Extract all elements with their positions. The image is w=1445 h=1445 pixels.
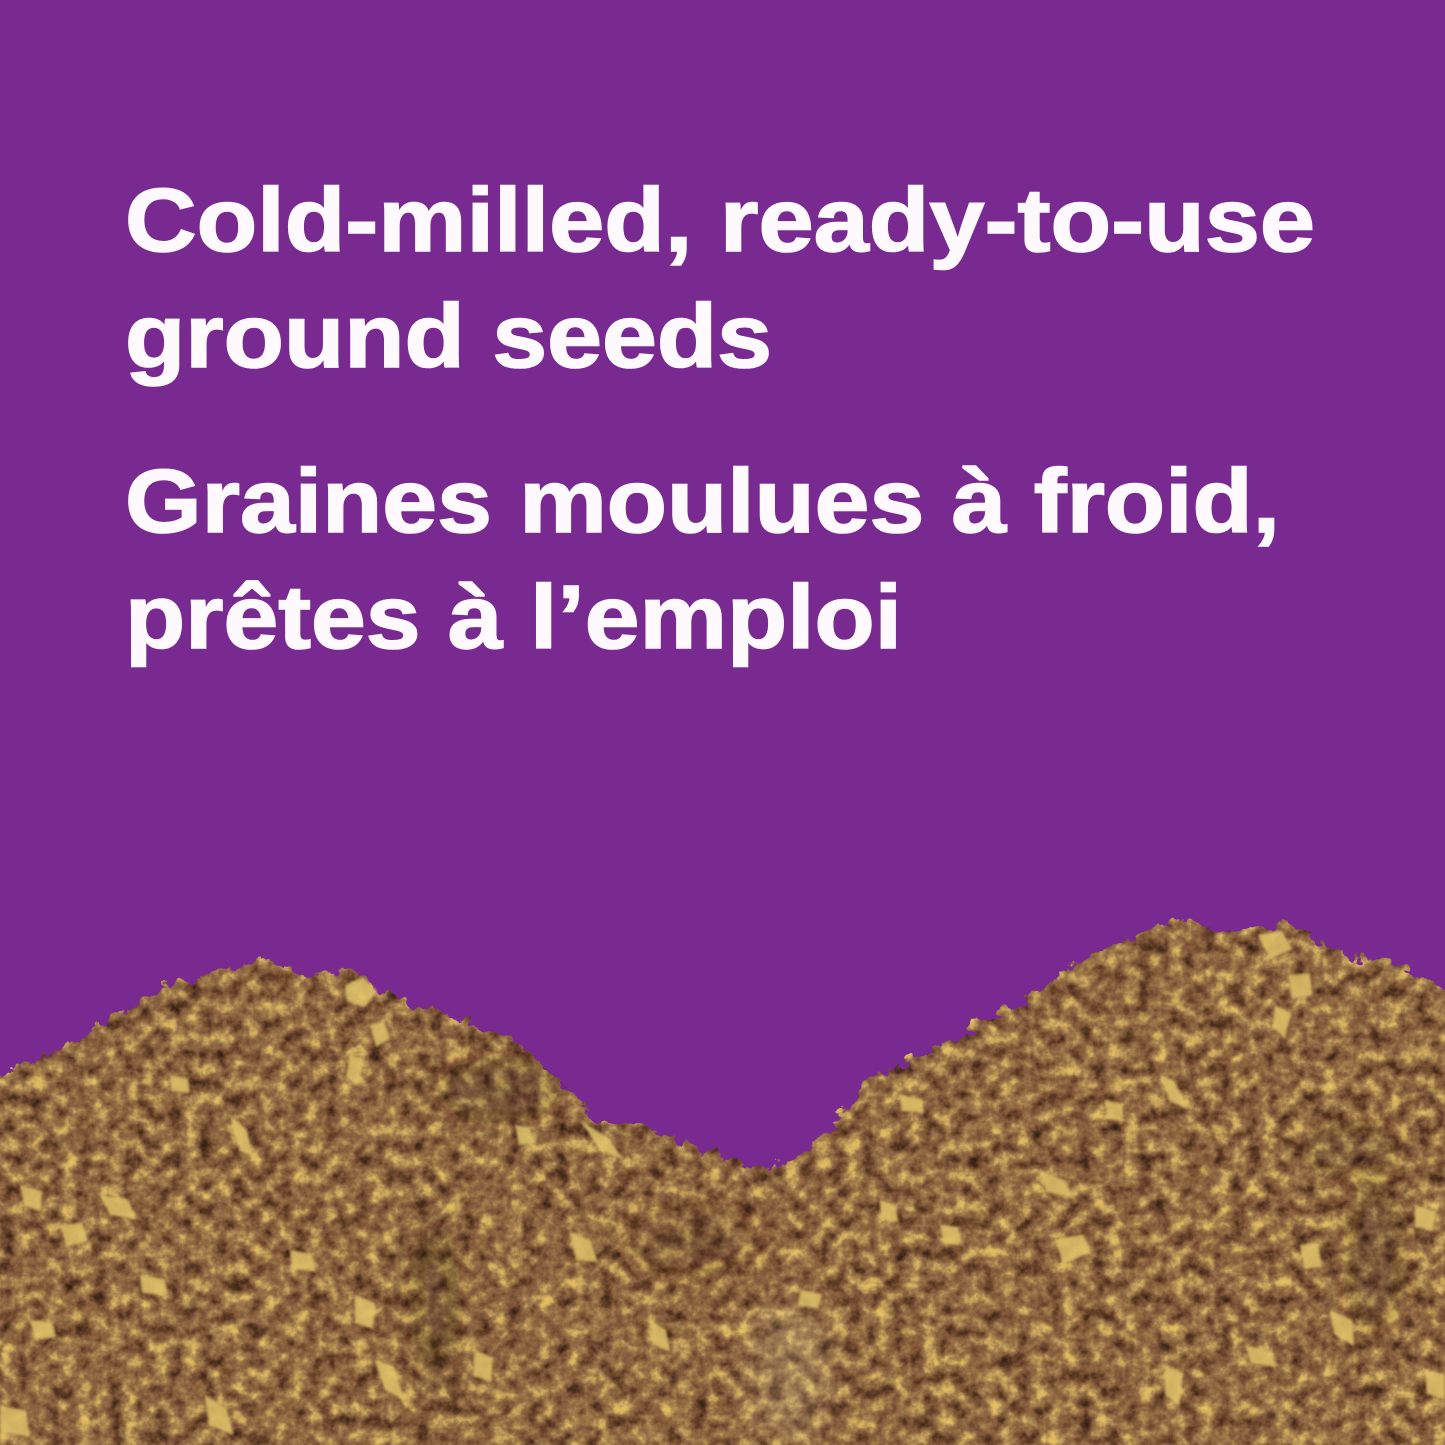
English heading <box>125 171 1315 387</box>
French heading <box>125 452 1280 668</box>
French heading: prêtes à l’emploi <box>125 568 902 668</box>
English heading: Cold-milled, ready-to-use <box>125 171 1315 271</box>
French heading: Graines moulues à froid, <box>125 452 1280 552</box>
English heading: ground seeds <box>125 287 772 387</box>
headline: English and French <box>125 171 1315 668</box>
yellow seed flecks <box>0 931 1445 1437</box>
ground flax seed piles <box>0 920 1445 1445</box>
